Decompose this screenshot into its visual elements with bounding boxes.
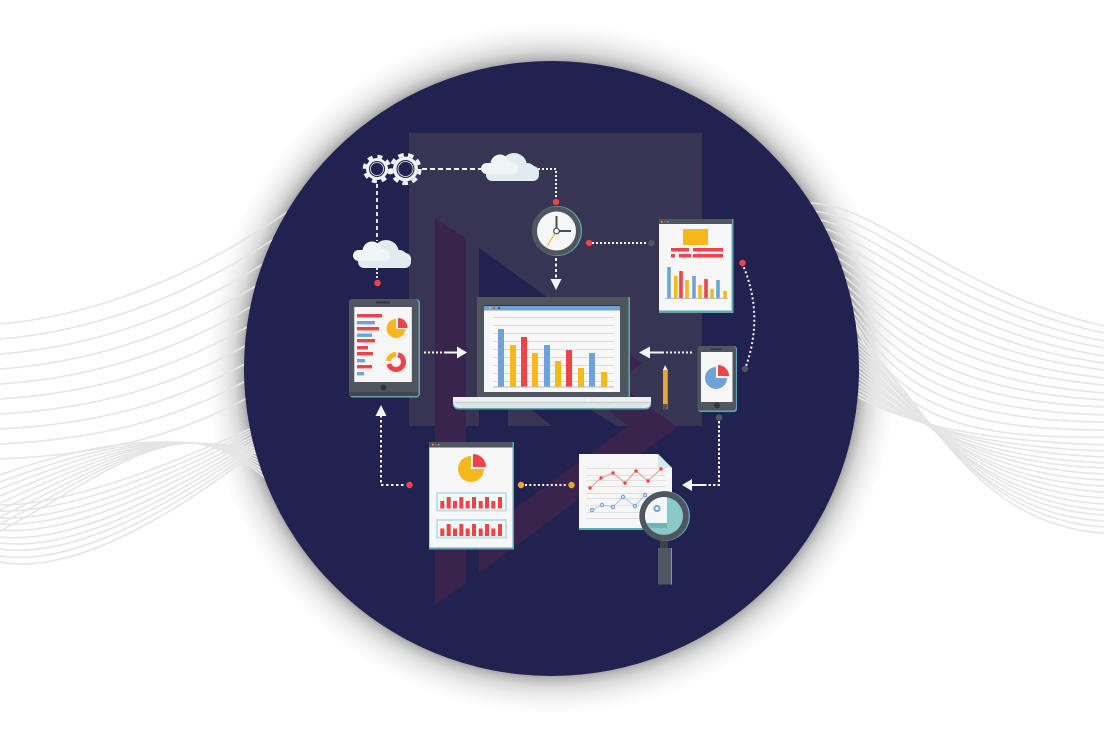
icon: tablet: [349, 299, 420, 398]
icon: phone: [698, 346, 737, 412]
tablet donut chart: [388, 354, 404, 369]
connector: report to phone curve: [739, 260, 754, 372]
blue line series: [590, 493, 657, 512]
connector dot: above clock: [553, 199, 559, 205]
wave lines right upper: [810, 203, 1104, 437]
wave lines left lower rising: [0, 420, 270, 564]
connector: clock to report: [586, 240, 655, 246]
wave lines left lower peak: [0, 442, 280, 531]
connector: gears to cloud to clock: [422, 169, 556, 198]
icon: cloud top: [481, 153, 539, 181]
panel: report lower: [429, 442, 514, 550]
arrow: clock to laptop: [550, 258, 562, 290]
icon: gear large: [391, 155, 420, 183]
mini bar panel 1: [437, 493, 506, 510]
watermark logo: [409, 133, 702, 605]
arrow: tablet to laptop: [424, 346, 467, 358]
tablet pie chart: [387, 318, 408, 338]
navy circle: [244, 61, 859, 676]
circle shadow halo: [206, 22, 898, 714]
connector dot: below cloud: [374, 280, 381, 286]
icon: gear small: [364, 156, 390, 182]
connector: phone to document: [682, 414, 722, 491]
mini bar panel 2: [437, 520, 506, 538]
panel: report top right: [659, 219, 734, 313]
connector: lower report to tablet: [376, 405, 413, 488]
panel: line chart document: [579, 454, 672, 530]
laptop screen chart: [484, 305, 620, 392]
icon: pencil: [663, 365, 668, 410]
wave lines left upper: [0, 210, 290, 459]
red line series: [588, 467, 663, 490]
icon: cloud left: [353, 240, 411, 268]
arrow: phone to laptop: [639, 346, 692, 358]
wave lines right lower: [850, 333, 1104, 533]
icon: clock: [532, 206, 582, 256]
laptop: [453, 297, 651, 410]
tablet list lines: [357, 314, 382, 375]
connector: document to lower report: [518, 482, 575, 488]
icon: magnifying glass: [639, 491, 690, 584]
laptop base: [453, 397, 651, 410]
connector: gears to lower cloud: [376, 184, 378, 280]
